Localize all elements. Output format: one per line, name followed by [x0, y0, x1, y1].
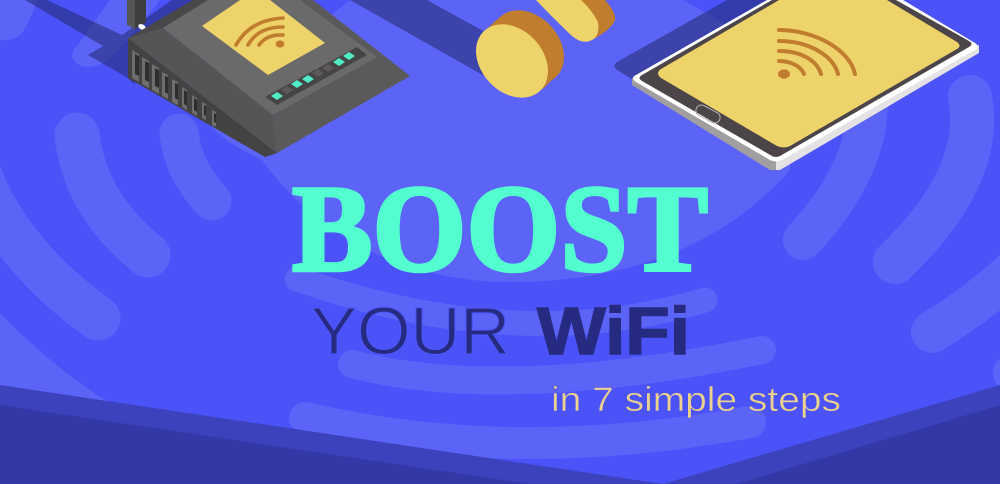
icon: tablet [632, 0, 979, 170]
tablet bezel [640, 0, 972, 157]
tablet screen [658, 0, 960, 148]
router antenna [127, 0, 147, 31]
icon: large wifi dot [461, 0, 579, 112]
icon: router [127, 0, 410, 157]
router screen with wifi icon [202, 0, 325, 75]
tablet edges [632, 0, 979, 170]
tablet home button [694, 103, 722, 125]
icon: large wifi arc [536, 0, 615, 42]
title: BOOST: BOOST [292, 160, 708, 298]
tagline: in 7 simple steps: in 7 simple steps [551, 381, 841, 419]
router ports [132, 50, 216, 127]
subtitle: YOUR WiFi [311, 294, 690, 369]
router status lights [265, 47, 367, 105]
subtitle: YOUR WiFi: WiFi [537, 294, 690, 369]
bottom chevron bands [0, 385, 1000, 484]
subtitle: YOUR WiFi: YOUR [311, 294, 510, 369]
tablet wifi icon [778, 30, 855, 79]
router body [128, 0, 410, 157]
object shadows [25, 0, 775, 85]
